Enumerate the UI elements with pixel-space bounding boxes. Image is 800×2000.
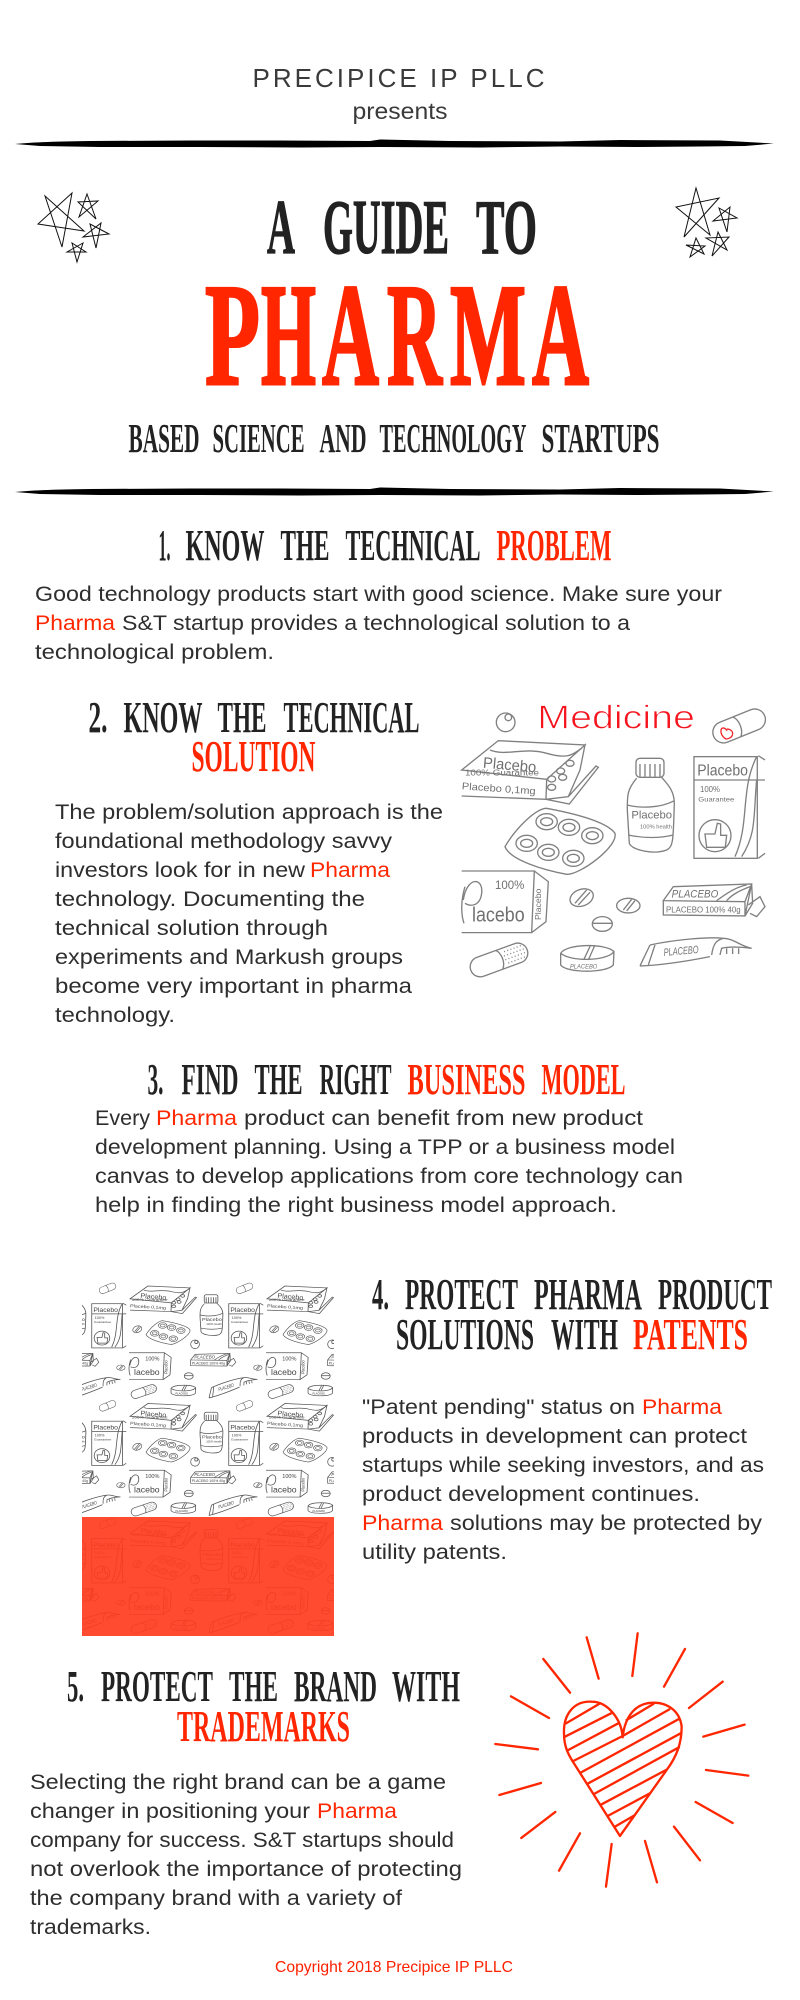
panel: section 5 — [30, 1633, 748, 1939]
header: company name: PRECIPICE IP PLLC — [252, 63, 544, 93]
title: a guide to — [267, 184, 537, 270]
brush divider bottom — [15, 488, 774, 496]
illustration: medicine doodles — [461, 699, 769, 980]
subtitle: AND — [320, 415, 366, 461]
heading 5 — [67, 1662, 460, 1751]
panel: section 2 — [55, 693, 769, 1027]
text block 5: trademarks. — [30, 1916, 151, 1939]
heading 2: SOLUTION — [192, 732, 316, 781]
panel: section 1 — [35, 521, 722, 664]
heading 3: 3. — [148, 1055, 164, 1104]
text block 2: investors look for in new — [55, 859, 306, 882]
title: pharma: R — [387, 254, 443, 416]
heading 3 — [148, 1055, 626, 1104]
heading 5: 5. — [67, 1662, 84, 1711]
brush divider top — [15, 140, 774, 148]
text block 3: help in finding the right business model approach. — [95, 1194, 617, 1217]
subtitle: TECHNOLOGY — [380, 415, 526, 461]
heading 1: 1. — [158, 521, 170, 570]
text block 4: products in development can protect — [362, 1425, 747, 1448]
heading 5: TRADEMARKS — [177, 1702, 350, 1751]
title: pharma: M — [450, 254, 526, 416]
text block 4: "Patent pending" status on — [362, 1396, 635, 1419]
title: pharma: A — [322, 254, 379, 416]
text block 2: experiments and Markush groups — [55, 946, 403, 969]
text block 3: canvas to develop applications from core technology can — [95, 1165, 683, 1188]
text block 2 — [55, 801, 443, 1027]
heading 2: THE — [218, 693, 266, 742]
icon: striped heart with rays — [495, 1633, 748, 1887]
panel: section 3 — [95, 1055, 683, 1217]
text block 4: product development continues. — [362, 1483, 700, 1506]
heading 3: THE — [254, 1055, 302, 1104]
title: a guide to: A — [267, 184, 295, 270]
title: pharma: A — [532, 254, 589, 416]
text block 1: Pharma — [35, 612, 115, 635]
subtitle — [128, 415, 660, 461]
heading 4: SOLUTIONS — [396, 1310, 534, 1359]
text block 5: not overlook the importance of protecting — [30, 1858, 462, 1881]
heading 1 — [158, 521, 612, 570]
footer: copyright: Copyright 2018 Precipice IP PLLC — [275, 1959, 513, 1976]
text block 2: Pharma — [310, 859, 390, 882]
heading 5: PROTECT — [101, 1662, 213, 1711]
text block 5: Pharma — [317, 1800, 397, 1823]
heading 4: PHARMA — [534, 1270, 642, 1319]
heading 1: TECHNICAL — [346, 521, 480, 570]
text block 5: the company brand with a variety of — [30, 1887, 402, 1910]
text block 5 — [30, 1771, 462, 1939]
heading 5: THE — [229, 1662, 278, 1711]
heading 3: BUSINESS — [408, 1055, 526, 1104]
illustration: medicine doodles: Medicine — [537, 699, 695, 736]
text block 2: technical solution through — [55, 917, 328, 940]
text block 1: technological problem. — [35, 641, 274, 664]
text block 5: changer in positioning your — [30, 1800, 310, 1823]
text block 3 — [95, 1107, 683, 1217]
text block 4: solutions may be protected by — [450, 1512, 763, 1535]
subtitle: SCIENCE — [212, 415, 304, 461]
subtitle: STARTUPS — [542, 415, 660, 461]
text block 5: company for success. S&T startups should — [30, 1829, 454, 1852]
icon: stars right — [676, 188, 737, 257]
heading 5: BRAND — [294, 1662, 377, 1711]
title: pharma: P — [205, 254, 260, 416]
text block 2: technology. — [55, 1004, 175, 1027]
title: pharma: H — [261, 254, 316, 416]
panel: section 4 — [82, 1280, 772, 1636]
heading 2: KNOW — [124, 693, 202, 742]
heading 4: 4. — [372, 1270, 389, 1319]
text block 2: foundational methodology savvy — [55, 830, 393, 853]
text block 4: Pharma — [642, 1396, 722, 1419]
text block 4: startups while seeking investors, and as — [362, 1454, 764, 1477]
text block 2: The problem/solution approach is the — [55, 801, 443, 824]
text block 4: utility patents. — [362, 1541, 507, 1564]
heading 4: PROTECT — [405, 1270, 518, 1319]
heading 4 — [372, 1270, 772, 1359]
text block 3: development planning. Using a TPP or a business model — [95, 1136, 675, 1159]
heading 4: WITH — [551, 1310, 618, 1359]
text block 3: Pharma — [156, 1107, 237, 1130]
text block 5: Selecting the right brand can be a game — [30, 1771, 446, 1794]
heading 3: MODEL — [542, 1055, 626, 1104]
text block 2: become very important in pharma — [55, 975, 412, 998]
heading 1: KNOW — [186, 521, 264, 570]
header: presents: presents — [352, 98, 448, 124]
text block 3: Every — [95, 1107, 151, 1130]
heading 2: 2. — [88, 693, 108, 742]
title: a guide to: GUIDE — [323, 184, 449, 270]
heading 2: TECHNICAL — [284, 693, 420, 742]
text block 4: Pharma — [362, 1512, 443, 1535]
heading 3: FIND — [182, 1055, 238, 1104]
subtitle: BASED — [128, 415, 200, 461]
text block 1: S&T startup provides a technological solution to a — [122, 612, 630, 635]
text block 3: product can benefit from new product — [244, 1107, 643, 1130]
title: a guide to: TO — [476, 184, 537, 270]
text block 2: technology. Documenting the — [55, 888, 365, 911]
text block 1 — [35, 583, 722, 664]
heading 3: RIGHT — [320, 1055, 392, 1104]
heading 5: WITH — [392, 1662, 460, 1711]
text block 1: Good technology products start with good science. Make sure your — [35, 583, 722, 606]
heading 2 — [88, 693, 420, 781]
heading 1: THE — [280, 521, 330, 570]
heading 1: PROBLEM — [496, 521, 612, 570]
text block 4 — [362, 1396, 764, 1564]
title: pharma — [205, 254, 589, 416]
icon: stars left — [38, 193, 109, 262]
illustration: pattern with red band — [82, 1282, 334, 1636]
